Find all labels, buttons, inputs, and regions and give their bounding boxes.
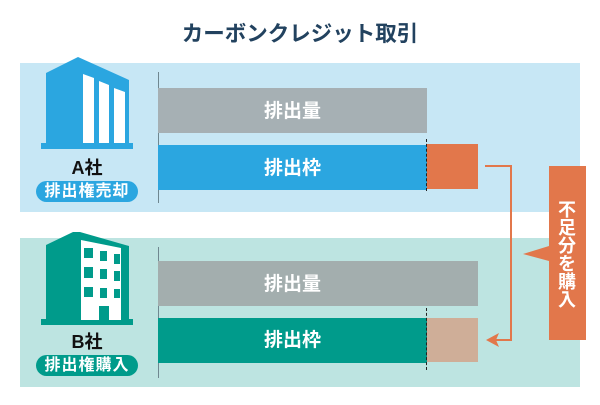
panel: company B <box>20 238 580 387</box>
bar: A surplus <box>427 144 478 189</box>
label: A company: A社 <box>72 158 102 178</box>
bar: B allowance <box>158 318 427 363</box>
panel: company A <box>20 63 580 212</box>
bar: B emissions: 排出量 <box>264 274 321 295</box>
axis line B <box>158 247 159 378</box>
label: B company: B社 <box>72 332 102 352</box>
axis line A <box>158 72 159 203</box>
callout: buy the shortfall: 入 <box>558 290 576 310</box>
dashed marker B <box>426 308 427 370</box>
callout: buy the shortfall: 分 <box>558 236 576 256</box>
bar: A emissions: 排出量 <box>264 101 321 122</box>
bar: B allowance: 排出枠 <box>264 330 321 351</box>
title: カーボンクレジット取引 <box>182 22 418 46</box>
badge: A sells allowance: 排出権売却 <box>44 183 130 200</box>
bar: A allowance <box>158 145 427 190</box>
callout: buy the shortfall: 購 <box>558 272 576 292</box>
bar: B emissions <box>158 261 478 306</box>
bar: A allowance: 排出枠 <box>264 158 321 179</box>
badge: B buys allowance: 排出権購入 <box>44 357 130 374</box>
bar: A emissions <box>158 88 427 133</box>
callout: buy the shortfall: 不 <box>558 200 576 220</box>
badge: B buys allowance <box>36 355 138 376</box>
callout: buy the shortfall: を <box>558 254 576 274</box>
bar: B shortfall <box>427 318 478 362</box>
badge: A sells allowance <box>36 181 138 202</box>
callout: buy the shortfall: 足 <box>558 218 576 238</box>
dashed marker A <box>426 139 427 191</box>
